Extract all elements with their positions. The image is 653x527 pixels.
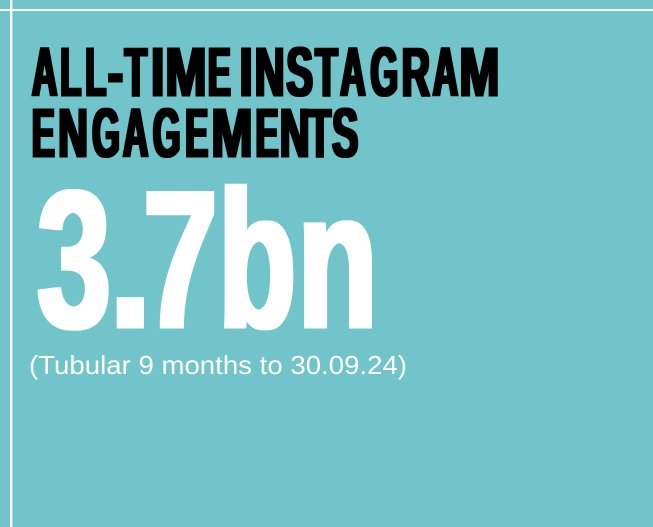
- heading: T: [315, 32, 338, 111]
- heading: E: [256, 94, 278, 172]
- heading: S: [332, 96, 358, 173]
- heading: [32, 32, 499, 173]
- heading: G: [370, 33, 398, 111]
- big number: b: [218, 151, 296, 370]
- heading: L: [60, 33, 81, 111]
- big number: [37, 149, 378, 370]
- heading: A: [123, 94, 148, 172]
- heading: A: [32, 33, 57, 111]
- heading: I: [151, 32, 165, 111]
- heading: M: [459, 33, 499, 111]
- heading: N: [58, 95, 88, 173]
- heading: E: [32, 94, 55, 172]
- big number: .: [108, 150, 152, 369]
- heading: A: [433, 33, 458, 111]
- heading: N: [255, 34, 285, 112]
- heading: G: [153, 94, 180, 172]
- big number: 7: [143, 150, 218, 370]
- heading: -: [108, 32, 123, 112]
- heading: L: [85, 33, 106, 111]
- heading: T: [125, 32, 147, 111]
- heading: R: [402, 35, 430, 112]
- heading: M: [211, 94, 253, 172]
- heading: E: [185, 94, 208, 172]
- big number: n: [298, 151, 378, 370]
- heading: I: [239, 32, 253, 111]
- heading: G: [92, 94, 120, 172]
- source note: (Tubular 9 months to 30.09.24): [29, 350, 407, 380]
- heading: T: [309, 93, 331, 172]
- heading: A: [340, 33, 366, 111]
- heading: N: [280, 95, 310, 173]
- big number: 3: [37, 149, 111, 370]
- heading: M: [165, 33, 207, 111]
- heading: S: [286, 34, 313, 112]
- heading: E: [208, 33, 231, 111]
